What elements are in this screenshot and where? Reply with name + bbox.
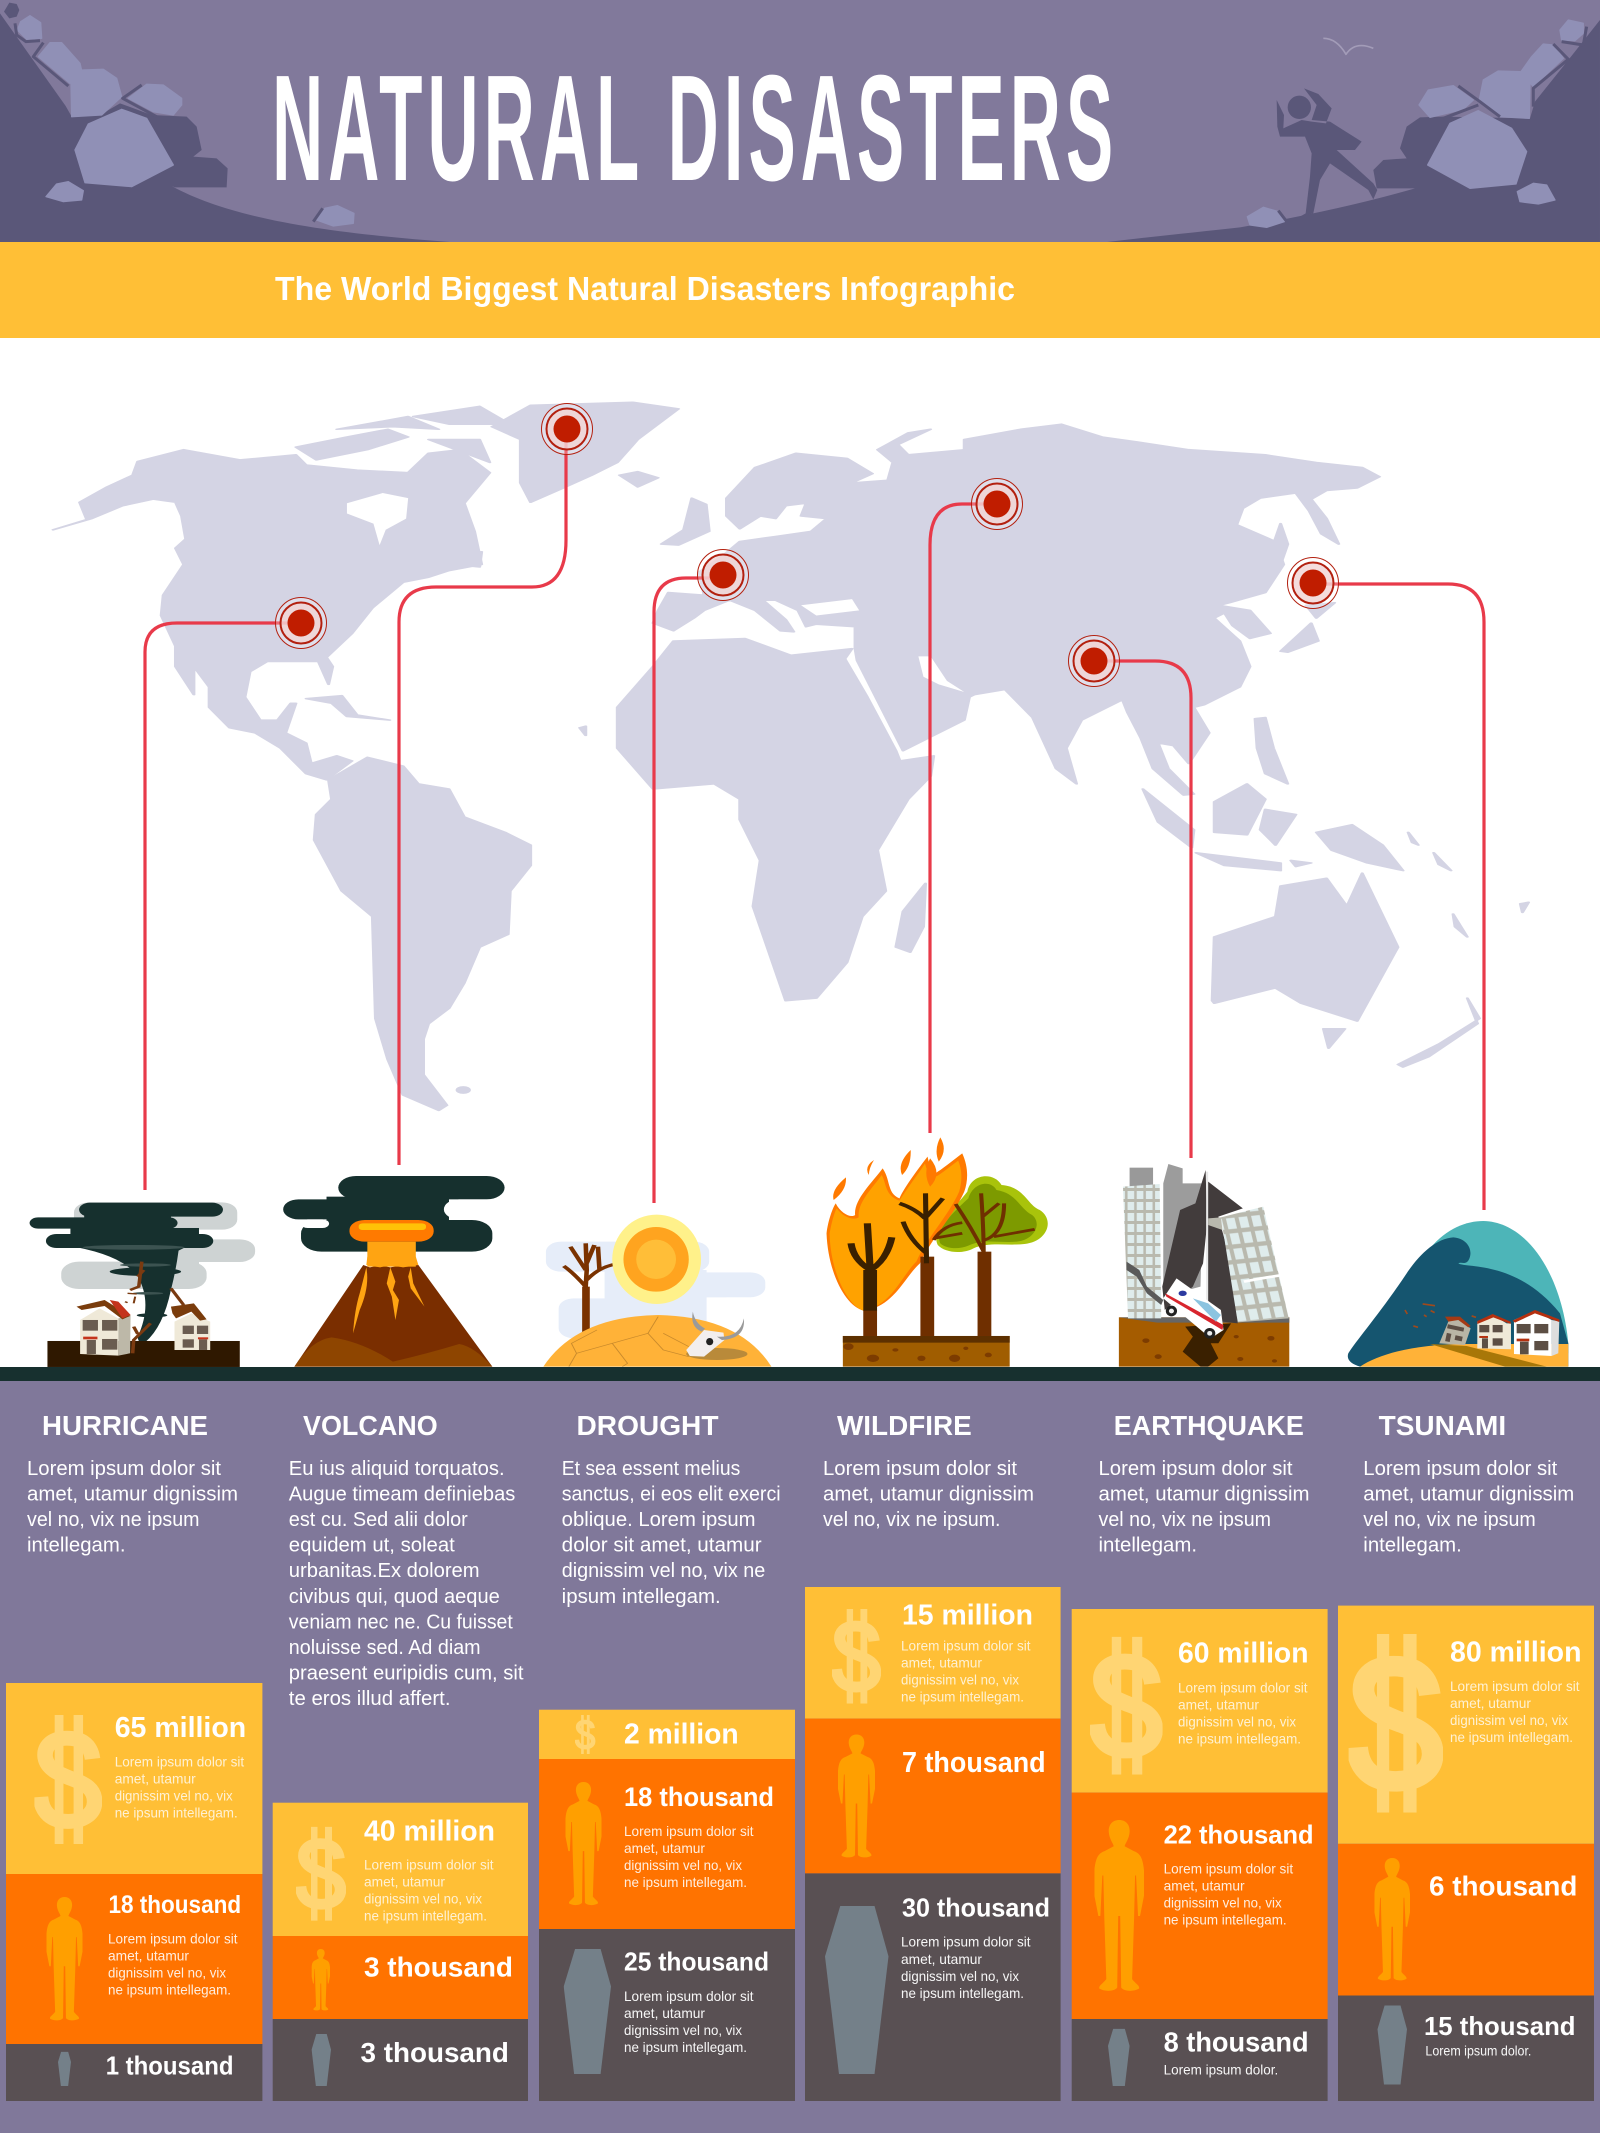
stat stack: wildfire: ne ipsum intellegam. [901, 1688, 1024, 1704]
heading: earthquake: EARTHQUAKE [1114, 1410, 1304, 1441]
heading: volcano: VOLCANO [303, 1410, 438, 1441]
middle house [1477, 1314, 1511, 1349]
stat stack: wildfire: amet, utamur [901, 1655, 982, 1671]
stat stack: drought: Lorem ipsum dolor sit [624, 1988, 754, 2004]
stat stack: wildfire: 15 million [902, 1600, 1033, 1632]
right rockslide illustration with fleeing person [1107, 20, 1600, 242]
stat stack: drought: ne ipsum intellegam. [624, 1874, 747, 1890]
trunks [863, 1310, 877, 1337]
crack [1183, 1323, 1231, 1367]
australia [1212, 873, 1398, 1021]
left house [77, 1300, 131, 1356]
dead tree [564, 1243, 616, 1333]
north america [53, 450, 490, 780]
subtitle band [0, 242, 1600, 338]
description: earthquake [1098, 1458, 1310, 1557]
illustration: drought [543, 1215, 771, 1367]
stat stack: volcano: 3 thousand [360, 2037, 509, 2068]
tilted house [1439, 1317, 1471, 1345]
stat stack: hurricane: Lorem ipsum dolor sit [108, 1930, 238, 1946]
line: wildfire [930, 504, 997, 1133]
description: earthquake: intellegam. [1098, 1535, 1197, 1557]
iceland [619, 472, 658, 487]
cow skull [686, 1312, 747, 1360]
stat stack: wildfire [805, 1587, 1061, 2101]
stat stack: volcano: dignissim vel no, vix [364, 1891, 482, 1907]
stat stack: drought: 2 million [624, 1718, 739, 1750]
pin: india [1068, 636, 1120, 686]
illustration: volcano [283, 1176, 510, 1367]
description: hurricane [27, 1458, 238, 1557]
debris [1405, 1304, 1476, 1327]
stat stack: drought: 25 thousand [624, 1947, 769, 1977]
location pins [276, 404, 1338, 686]
line: earthquake [1094, 661, 1191, 1158]
line: hurricane [145, 623, 301, 1190]
right house [171, 1303, 210, 1350]
green tree foliage [936, 1176, 1048, 1252]
icon: coffin [312, 2034, 331, 2086]
description: earthquake: amet, utamur dignissim [1098, 1484, 1310, 1506]
description: tsunami: intellegam. [1363, 1535, 1462, 1557]
illustration: earthquake [1119, 1164, 1289, 1367]
stat stack: volcano: 40 million [364, 1815, 495, 1847]
description: volcano: praesent euripidis cum, sit [289, 1663, 524, 1685]
header banner [0, 0, 1600, 242]
description: drought: ipsum intellegam. [562, 1586, 721, 1608]
description: volcano: est cu. Sed alii dolor [289, 1509, 468, 1531]
heading: wildfire: WILDFIRE [837, 1410, 972, 1441]
falklands [457, 1087, 469, 1093]
bird [1323, 38, 1373, 54]
description: hurricane: vel no, vix ne ipsum [27, 1509, 200, 1531]
stat stack: wildfire: 30 thousand [902, 1892, 1050, 1922]
description: volcano [289, 1458, 524, 1710]
stat stack: earthquake: Lorem ipsum dolor sit [1164, 1861, 1293, 1877]
philippines and southeast asian islands [1143, 718, 1296, 871]
eurasia [653, 424, 1380, 795]
description: drought [562, 1458, 781, 1608]
description: wildfire [823, 1458, 1034, 1531]
stat stack: earthquake: 22 thousand [1164, 1820, 1314, 1850]
stat stack: hurricane: 65 million [115, 1712, 246, 1744]
stat stack: hurricane [6, 1683, 262, 2101]
stat stack: hurricane: ne ipsum intellegam. [108, 1981, 231, 1997]
column: volcano [273, 1410, 528, 2101]
line: tsunami [1313, 584, 1484, 1210]
stat stack: tsunami: 80 million [1450, 1636, 1582, 1668]
description: volcano: equidem ut, soleat [289, 1535, 455, 1557]
left rockslide illustration [0, 3, 450, 242]
sand [1360, 1344, 1568, 1367]
stat stack: earthquake: dignissim vel no, vix [1164, 1894, 1282, 1910]
icon: dollar [1357, 1634, 1433, 1813]
stat stack: wildfire: Lorem ipsum dolor sit [901, 1637, 1031, 1653]
stat stack: earthquake [1072, 1609, 1328, 2101]
connector lines [145, 429, 1484, 1210]
front wave [1348, 1237, 1568, 1367]
illustration: wildfire [827, 1137, 1048, 1367]
black sea and persian gulf cut-outs [801, 599, 964, 692]
soil [1119, 1317, 1289, 1367]
stat stack: drought: ne ipsum intellegam. [624, 2039, 747, 2055]
icon: dollar [1097, 1637, 1155, 1775]
pin: russia [972, 478, 1022, 530]
description: hurricane: Lorem ipsum dolor sit [27, 1458, 221, 1480]
stat stack: earthquake: Lorem ipsum dolor sit [1178, 1680, 1308, 1696]
stat stack: wildfire: dignissim vel no, vix [901, 1672, 1019, 1688]
icon: person [1094, 1820, 1144, 1991]
stat stack: drought: 18 thousand [624, 1782, 774, 1812]
description: drought: dignissim vel no, vix ne [562, 1560, 765, 1582]
stat stack: earthquake: amet, utamur [1178, 1696, 1259, 1712]
description: drought: oblique. Lorem ipsum [562, 1509, 756, 1531]
sun [612, 1215, 701, 1304]
lava column [367, 1242, 416, 1267]
description: hurricane: amet, utamur dignissim [27, 1484, 238, 1506]
icon: coffin [1378, 2006, 1407, 2084]
description: tsunami: Lorem ipsum dolor sit [1363, 1458, 1558, 1480]
broken trees [130, 1262, 184, 1353]
stat stack: hurricane: 1 thousand [106, 2051, 234, 2081]
description: volcano: urbanitas.Ex dolorem [289, 1560, 480, 1582]
subtitle: The World Biggest Natural Disasters Infographic [275, 270, 1015, 307]
description: volcano: Augue timeam definiebas [289, 1484, 515, 1506]
icon: person [1374, 1858, 1410, 1980]
heading: hurricane: HURRICANE [42, 1410, 208, 1441]
stat stack: hurricane: dignissim vel no, vix [108, 1964, 226, 1980]
description: wildfire: Lorem ipsum dolor sit [823, 1458, 1017, 1480]
stat stack: earthquake: amet, utamur [1164, 1878, 1245, 1894]
south america [314, 757, 531, 1110]
stat stack: hurricane: amet, utamur [115, 1771, 196, 1787]
stat stack: volcano: Lorem ipsum dolor sit [364, 1857, 494, 1873]
arctic islands [296, 406, 510, 567]
stat stack: volcano [273, 1803, 528, 2101]
icon: person [566, 1782, 602, 1905]
small pacific and atlantic islands [580, 726, 1529, 912]
back wave [1430, 1221, 1568, 1353]
stat stack: tsunami: 6 thousand [1429, 1871, 1577, 1902]
buildings [1130, 1168, 1153, 1188]
description: volcano: te eros illud affert. [289, 1688, 450, 1710]
description: earthquake: vel no, vix ne ipsum [1098, 1509, 1271, 1531]
stat stack: earthquake: ne ipsum intellegam. [1178, 1730, 1301, 1746]
stat stack: drought: dignissim vel no, vix [624, 1857, 742, 1873]
madagascar [896, 883, 926, 952]
description: drought: Et sea essent melius [562, 1458, 740, 1480]
fleeing person [1277, 88, 1377, 217]
stat stack: hurricane: ne ipsum intellegam. [115, 1805, 238, 1821]
stat stack: hurricane: Lorem ipsum dolor sit [115, 1754, 244, 1770]
stat stack: wildfire: dignissim vel no, vix [901, 1968, 1019, 1984]
new zealand [1398, 914, 1480, 1067]
stat stack: drought: Lorem ipsum dolor sit [624, 1823, 754, 1839]
line: volcano [399, 429, 566, 1165]
ground strip [0, 1367, 1600, 1381]
world map [53, 402, 1529, 1110]
stat stack: drought: dignissim vel no, vix [624, 2022, 742, 2038]
uk and ireland [661, 498, 709, 545]
tasmania [1323, 1029, 1345, 1048]
stat stack: earthquake: dignissim vel no, vix [1178, 1713, 1296, 1729]
stat stack: hurricane: dignissim vel no, vix [115, 1788, 233, 1804]
stat stack: tsunami: dignissim vel no, vix [1450, 1712, 1568, 1728]
column: drought [539, 1410, 795, 2101]
description: tsunami: amet, utamur dignissim [1363, 1484, 1574, 1506]
icon: coffin [825, 1906, 888, 2074]
stat stack: wildfire: 7 thousand [902, 1747, 1046, 1779]
description: volcano: civibus qui, quod aeque [289, 1586, 500, 1608]
japan and sakhalin [1273, 524, 1335, 652]
column: tsunami [1338, 1410, 1594, 2101]
icon: person [838, 1734, 875, 1857]
column: earthquake [1072, 1410, 1328, 2101]
stat stack: tsunami: Lorem ipsum dolor sit [1450, 1678, 1580, 1694]
stat stack: volcano: ne ipsum intellegam. [364, 1908, 487, 1924]
pin: japan [1288, 558, 1338, 608]
stat stack: drought [539, 1710, 795, 2101]
cracked earth [543, 1315, 771, 1367]
icon: coffin [1108, 2029, 1130, 2086]
pin: north america [276, 598, 326, 648]
heading: tsunami: TSUNAMI [1379, 1410, 1506, 1441]
pin: greenland [542, 404, 592, 454]
description: wildfire: vel no, vix ne ipsum. [823, 1509, 1000, 1531]
ground [47, 1341, 240, 1367]
stat stack: earthquake: ne ipsum intellegam. [1164, 1912, 1287, 1928]
icon: dollar [40, 1715, 95, 1844]
stat stack: tsunami: ne ipsum intellegam. [1450, 1729, 1573, 1745]
heading: drought: DROUGHT [576, 1410, 718, 1441]
flames [827, 1153, 967, 1311]
illustration: tsunami [1348, 1221, 1568, 1367]
stat stack: volcano: amet, utamur [364, 1874, 445, 1890]
stat stack: tsunami [1338, 1606, 1594, 2101]
title: NATURAL DISASTERS [272, 43, 1118, 212]
lava streaks [353, 1267, 424, 1333]
icon: dollar [836, 1609, 876, 1704]
column: wildfire [805, 1410, 1061, 2101]
stat stack: tsunami: amet, utamur [1450, 1695, 1531, 1711]
stat stack: drought: amet, utamur [624, 2005, 705, 2021]
lower purple panel [0, 1381, 1600, 2133]
column: hurricane [6, 1410, 262, 2101]
caribbean [306, 696, 390, 720]
stat stack: hurricane: amet, utamur [108, 1947, 189, 1963]
greenland [492, 402, 679, 502]
description: hurricane: intellegam. [27, 1535, 126, 1557]
description: tsunami: vel no, vix ne ipsum [1363, 1509, 1536, 1531]
description: tsunami [1363, 1458, 1574, 1557]
icon: coffin [58, 2052, 71, 2086]
stat stack: earthquake: 8 thousand [1164, 2027, 1309, 2058]
description: drought: sanctus, ei eos elit exerci [562, 1484, 781, 1506]
description: drought: dolor sit amet, utamur [562, 1535, 762, 1557]
cone [294, 1265, 492, 1367]
hudson bay cut-out [347, 493, 408, 545]
stat stack: earthquake: Lorem ipsum dolor. [1164, 2061, 1278, 2077]
pin: europe [698, 550, 748, 600]
stat stack: volcano: 3 thousand [364, 1952, 513, 1983]
ambulance [1163, 1278, 1223, 1339]
icon: dollar [300, 1827, 341, 1921]
line: drought [654, 578, 722, 1203]
description: earthquake: Lorem ipsum dolor sit [1098, 1458, 1293, 1480]
africa [617, 638, 934, 1001]
front house [1513, 1310, 1559, 1356]
description: wildfire: amet, utamur dignissim [823, 1484, 1034, 1506]
stat stack: wildfire: amet, utamur [901, 1951, 982, 1967]
stat stack: wildfire: ne ipsum intellegam. [901, 1985, 1024, 2001]
icon: dollar [577, 1715, 593, 1754]
new guinea [1316, 825, 1403, 871]
icon: person [46, 1897, 82, 2020]
description: volcano: noluisse sed. Ad diam [289, 1637, 481, 1659]
stat stack: tsunami: 15 thousand [1424, 2011, 1576, 2041]
soil [843, 1336, 1010, 1367]
stat stack: wildfire: Lorem ipsum dolor sit [901, 1934, 1031, 1950]
icon: coffin [564, 1949, 611, 2074]
stat stack: earthquake: 60 million [1178, 1638, 1308, 1670]
description: volcano: veniam nec ne. Cu fuisset [289, 1611, 513, 1633]
stat stack: tsunami: Lorem ipsum dolor. [1425, 2043, 1531, 2059]
description: volcano: Eu ius aliquid torquatos. [289, 1458, 505, 1480]
stat stack: hurricane: 18 thousand [108, 1891, 241, 1919]
stat stack: drought: amet, utamur [624, 1840, 705, 1856]
icon: person [312, 1949, 330, 2010]
illustration: hurricane [30, 1202, 255, 1367]
